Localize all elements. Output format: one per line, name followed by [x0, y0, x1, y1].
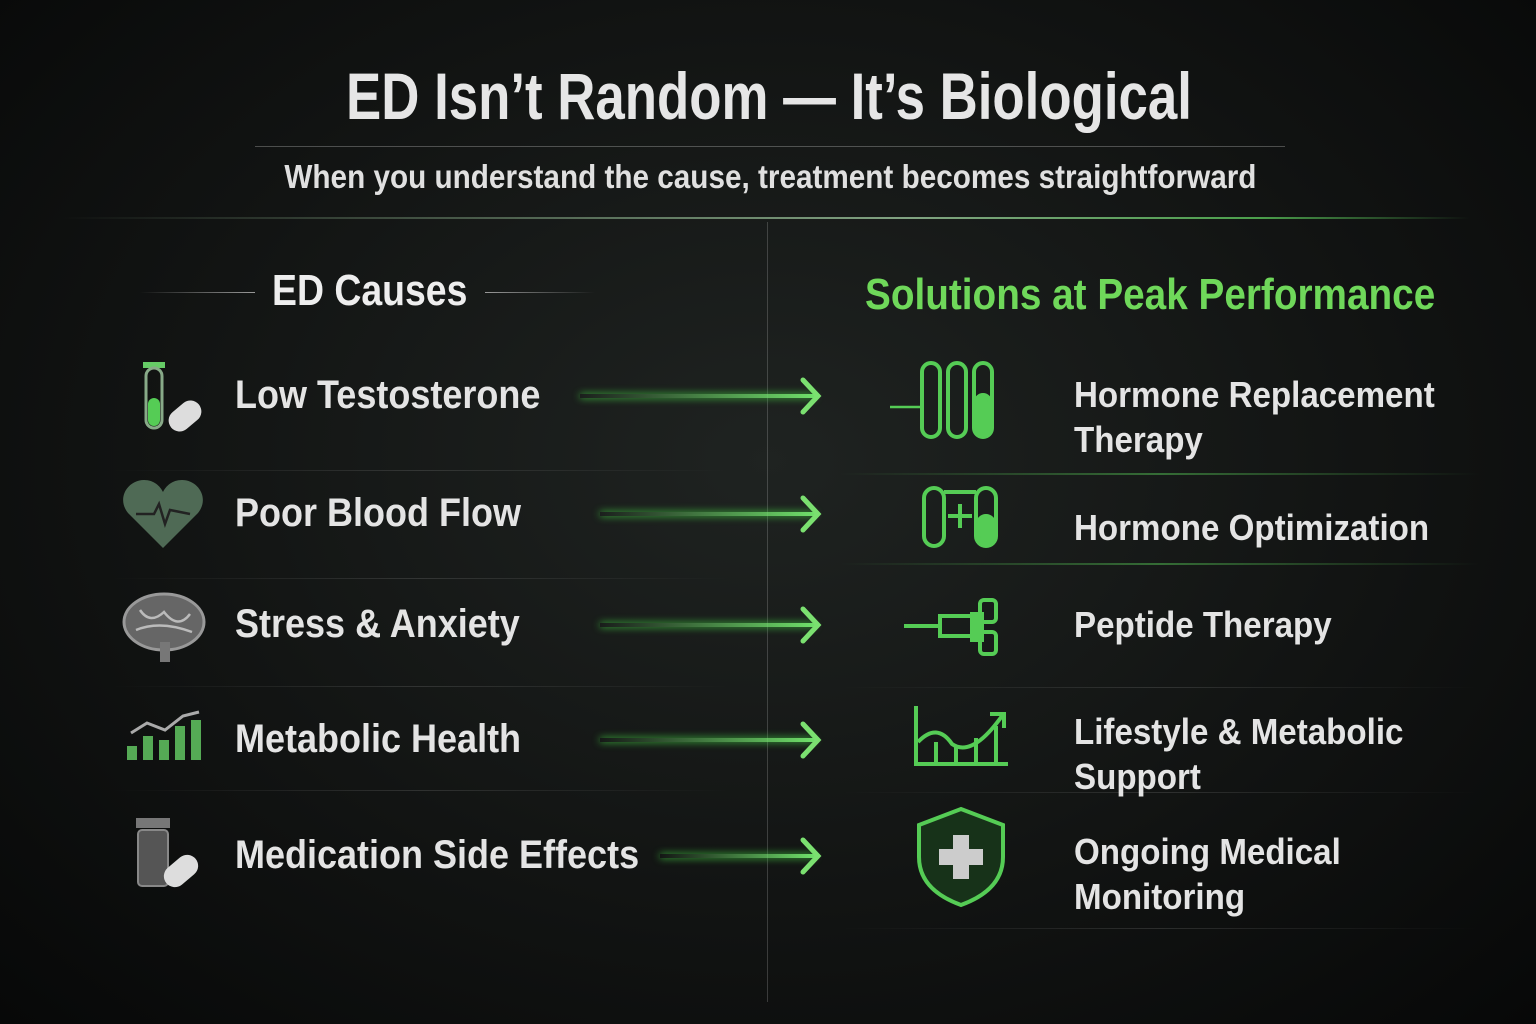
cause: Metabolic Health: Metabolic Health — [235, 717, 521, 761]
solution: HRT: Hormone Replacement — [1074, 374, 1435, 415]
solution: Monitoring — [1074, 831, 1341, 917]
icon: test tube and pill — [143, 362, 202, 432]
solution: Lifestyle: Lifestyle & Metabolic — [1074, 711, 1403, 752]
icon: chart — [127, 710, 201, 760]
heading: Solutions: Solutions at Peak Performance — [865, 270, 1435, 319]
arrow 4 — [600, 738, 815, 742]
icon: growth chart — [914, 706, 1008, 766]
causes list — [122, 362, 638, 888]
solution: Lifestyle: Support — [1074, 756, 1201, 797]
icon: tubes with plus — [922, 486, 998, 548]
icon: syringe — [904, 598, 998, 656]
arrow 1 — [580, 394, 815, 398]
solution: Monitoring: Monitoring — [1074, 876, 1245, 917]
icon: heart — [123, 480, 203, 548]
solutions list — [872, 361, 1450, 929]
cause: Low Testosterone: Low Testosterone — [235, 373, 540, 417]
divider — [767, 222, 768, 1002]
icon: shield — [917, 806, 1005, 908]
solution: HRT: Therapy — [1074, 419, 1203, 460]
heading: ED Causes: ED Causes — [272, 266, 467, 315]
icon: tubes with pulse — [890, 361, 994, 439]
solution: Hormone Optimization: Hormone Optimization — [1074, 507, 1429, 548]
title: ED Isn’t Random — It’s Biological — [346, 59, 1192, 133]
arrows — [576, 378, 822, 874]
arrow 3 — [600, 623, 815, 627]
solution: HRT — [1074, 374, 1435, 460]
solution: Monitoring: Ongoing Medical — [1074, 831, 1341, 872]
cause: Medication Side Effects: Medication Side Effects — [235, 833, 639, 877]
arrow 5 — [660, 854, 815, 858]
subtitle: When you understand the cause, treatment becomes straightforward — [284, 158, 1256, 195]
cause: Poor Blood Flow: Poor Blood Flow — [235, 491, 521, 535]
solution: Lifestyle — [1074, 711, 1403, 797]
icon: brain — [122, 592, 206, 662]
solution: Peptide Therapy: Peptide Therapy — [1074, 604, 1332, 645]
arrow 2 — [600, 512, 815, 516]
icon: pill bottle — [136, 818, 198, 888]
cause: Stress & Anxiety: Stress & Anxiety — [235, 602, 520, 646]
